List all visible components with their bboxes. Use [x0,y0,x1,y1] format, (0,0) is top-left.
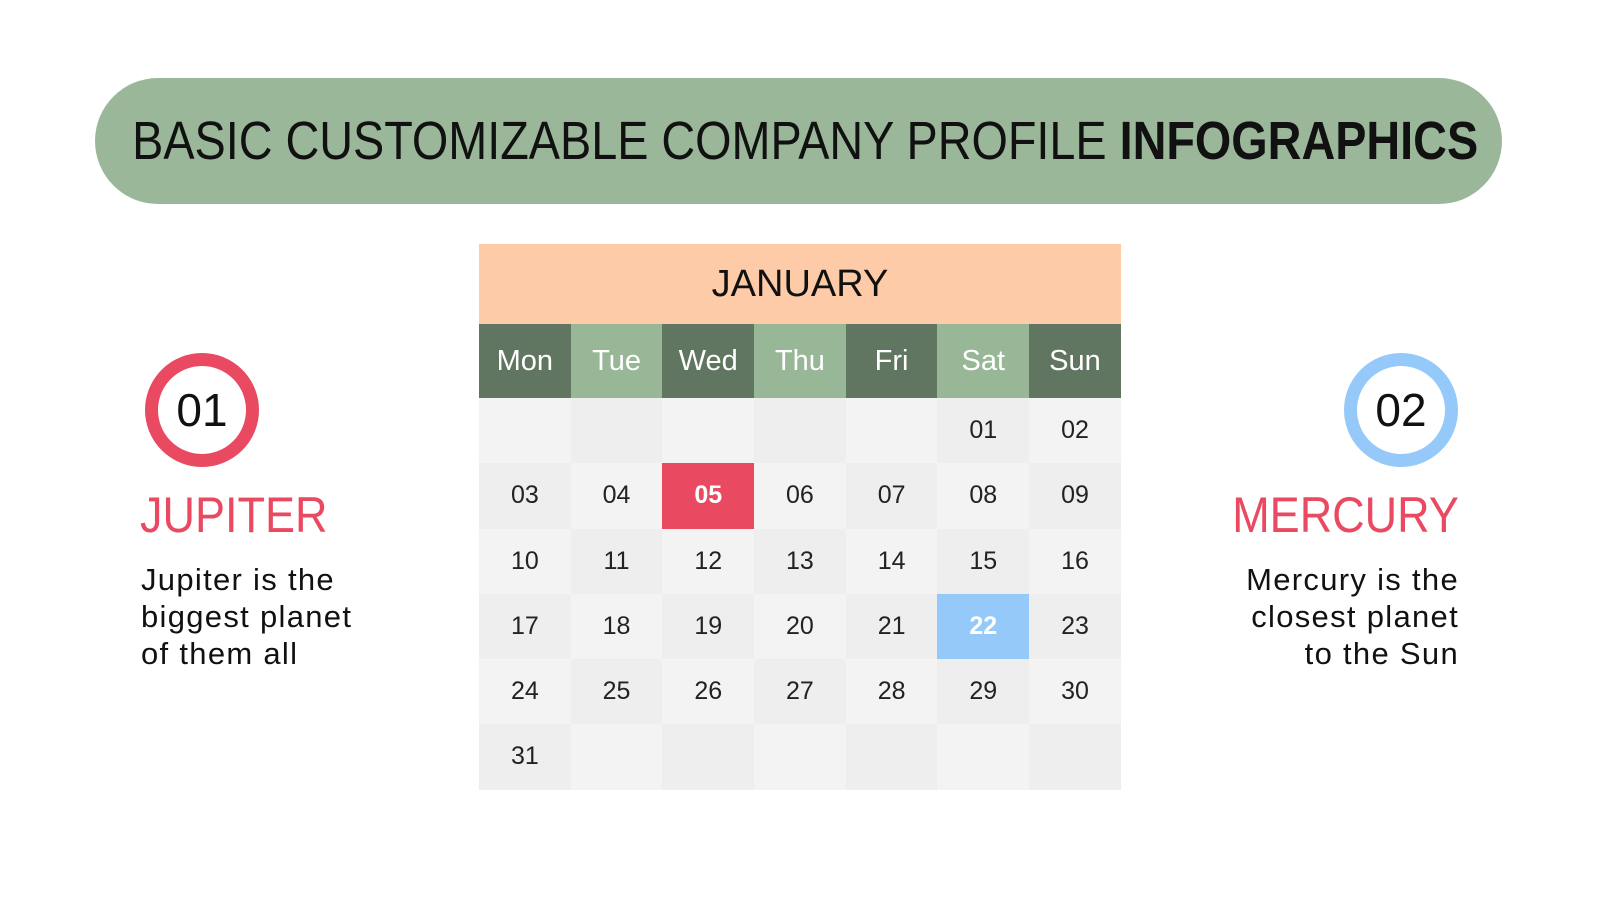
text: Jupiter description: biggest planet [141,599,352,634]
month header [479,244,1121,324]
date grid: 12 [694,547,722,575]
calendar [479,244,1121,790]
heading: Mercury: MERCURY [1232,487,1459,543]
date grid: 20 [786,612,814,640]
date grid: 23 [1061,612,1089,640]
title text: BASIC CUSTOMIZABLE COMPANY PROFILE INFOGRAPHICS [132,111,1479,171]
date grid: 16 [1061,547,1089,575]
weekday row: Sun [1049,345,1101,377]
icon: number circle 01 [145,353,259,467]
date grid: 02 [1061,416,1089,444]
date grid: 30 [1061,677,1089,705]
date grid: 24 [511,677,539,705]
text: Mercury description [1246,562,1459,671]
text: Mercury description: closest planet [1251,599,1459,634]
date grid: 28 [878,677,906,705]
month header: JANUARY [712,263,888,305]
weekday row [479,324,1121,398]
date grid: 17 [511,612,539,640]
date grid: 25 [603,677,630,705]
text: Mercury description: Mercury is the [1246,562,1459,597]
text: Jupiter description: of them all [141,636,298,671]
date grid: 15 [969,547,997,575]
date grid: 05 [694,481,722,509]
weekday row: Tue [592,345,641,377]
icon: number circle 02: 02 [1375,384,1427,436]
heading: Jupiter: JUPITER [140,487,328,543]
date grid: 08 [969,481,997,509]
weekday row: Wed [679,345,738,377]
date grid: 01 [969,416,997,444]
date grid: 31 [511,742,539,770]
date grid: 04 [603,481,630,509]
date grid: 10 [511,547,539,575]
date grid: 21 [878,612,906,640]
date grid: 19 [694,612,722,640]
date grid [479,398,1121,790]
date grid: 29 [969,677,997,705]
weekday row: Sat [962,345,1005,377]
icon: number circle 02 [1344,353,1458,467]
date grid: 06 [786,481,814,509]
date grid: 11 [604,547,630,575]
text: Jupiter description [141,562,352,671]
weekday row: Fri [875,345,908,377]
date grid: 27 [786,677,814,705]
weekday row: Mon [497,345,553,377]
weekday row: Thu [775,345,825,377]
date grid: 03 [511,481,539,509]
date grid: 14 [878,547,906,575]
text: Mercury description: to the Sun [1305,636,1459,671]
date grid: 18 [603,612,630,640]
date grid: 26 [694,677,722,705]
text: Jupiter description: Jupiter is the [141,562,335,597]
icon: number circle 01: 01 [176,384,228,436]
title banner [95,78,1502,204]
date grid: 09 [1061,481,1089,509]
date grid: 22 [969,612,997,640]
date grid: 07 [878,481,906,509]
date grid: 13 [786,547,814,575]
